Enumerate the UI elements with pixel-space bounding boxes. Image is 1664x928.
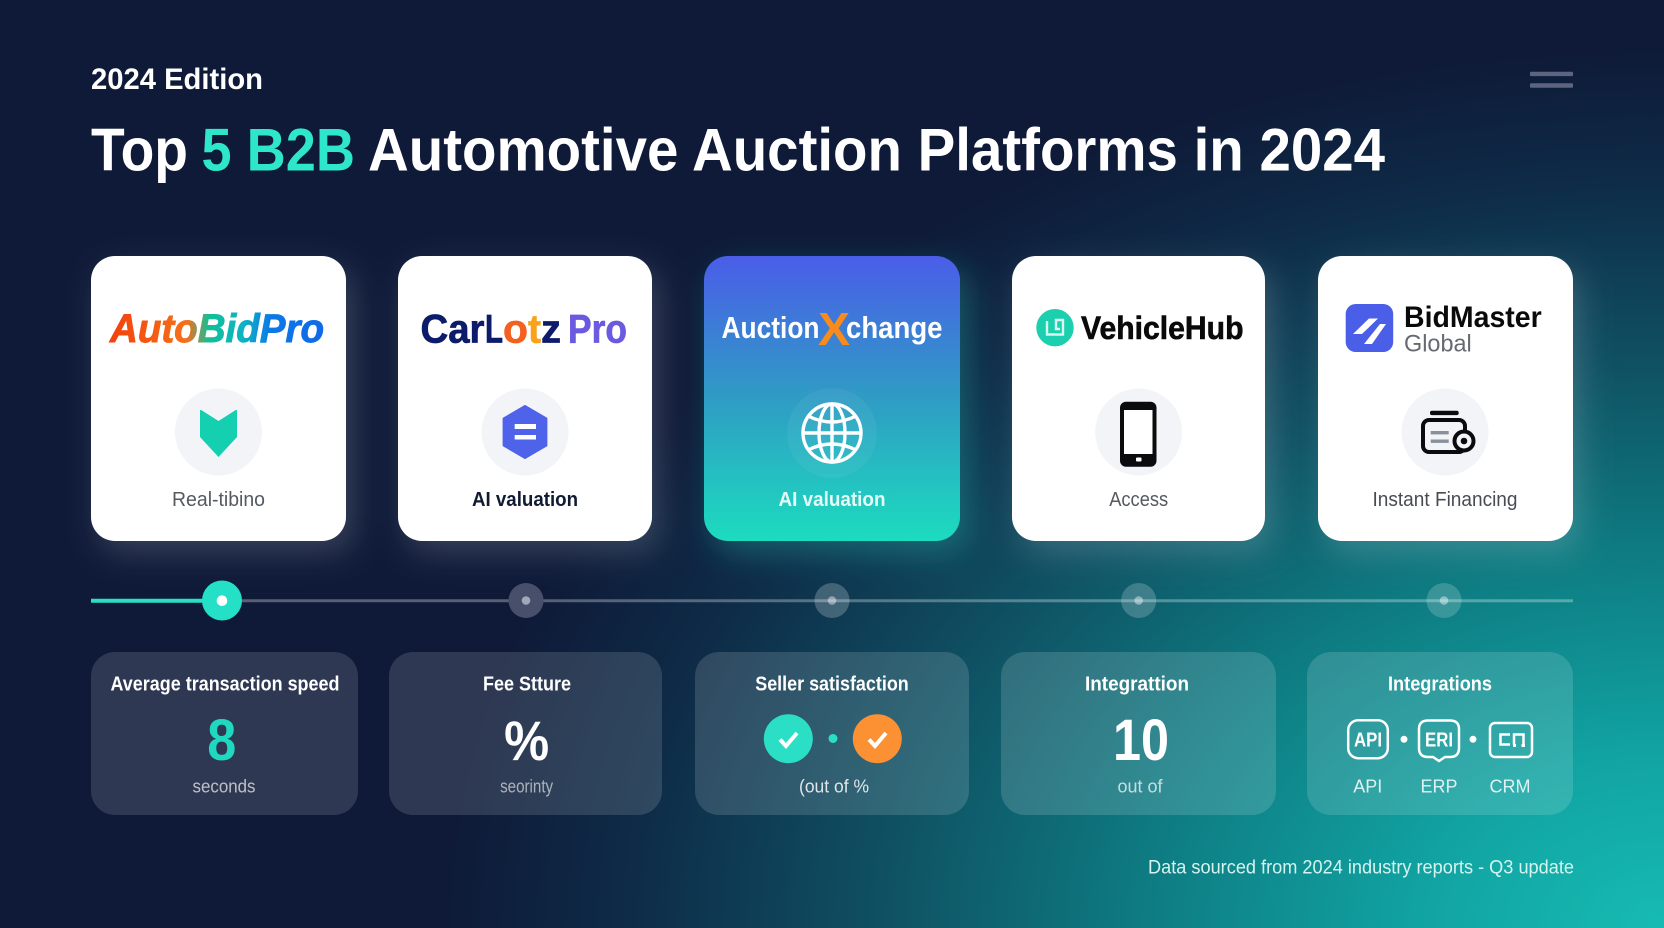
icon: dot [1470, 736, 1476, 743]
panel: integrations [1307, 652, 1573, 815]
node: active [202, 580, 242, 620]
panel: BidMaster Global card [1318, 256, 1573, 541]
logo: CarLotz Pro: Pro [568, 308, 627, 352]
timeline [91, 580, 1573, 620]
logo: CarLotz Pro: L [485, 308, 503, 352]
node: 4 [1121, 583, 1156, 618]
logo: CarLotz Pro: o [503, 308, 528, 352]
logo: CarLotz Pro: t [528, 308, 541, 352]
logo: AutoBidPro: AutoBidPro [109, 307, 324, 351]
logo: VehicleHub: VehicleHub [1081, 310, 1244, 346]
title: Top [91, 116, 188, 184]
label: feature: AI valuation [778, 489, 886, 511]
logo: AuctionXchange: Auction [722, 310, 820, 345]
panel: fee structure [389, 652, 662, 815]
stat title: Seller satisfaction [755, 674, 909, 696]
icon: teal check [764, 714, 813, 763]
logo: CarLotz Pro: z [541, 308, 561, 352]
card glows [99, 268, 1581, 553]
label: API: API [1353, 777, 1382, 797]
panel: AutoBidPro card [91, 256, 346, 541]
label: ERP: ERP [1420, 777, 1458, 797]
label: CRM: CRM [1490, 777, 1530, 797]
icon: API: API [1354, 730, 1382, 752]
logo: BidMaster Global [1346, 301, 1542, 358]
icon: hexagon [482, 388, 568, 476]
panel: average transaction speed [91, 652, 358, 815]
label: feature: Instant Financing [1372, 489, 1518, 511]
stat unit: (out of % [799, 777, 869, 797]
icon: phone [1095, 388, 1182, 476]
stat title: Fee Stture [483, 674, 571, 696]
logo: AuctionXchange: X [818, 303, 850, 355]
icon: globe [787, 388, 877, 478]
icon: menu [1530, 72, 1573, 88]
stat value: 10 [1113, 708, 1169, 773]
title: Automotive Auction Platforms in 2024 [368, 116, 1386, 184]
node: 2 [508, 583, 544, 618]
stat title: Integrattion [1085, 674, 1189, 696]
stat unit: out of [1118, 777, 1163, 797]
label: feature: AI valuation [472, 489, 578, 511]
stat unit: seconds [192, 777, 256, 797]
logo: BidMaster Global: BidMaster [1404, 301, 1542, 334]
logo: AuctionXchange: change [846, 310, 942, 345]
logo: CarLotz Pro: Car [420, 308, 484, 352]
node: 5 [1426, 583, 1462, 618]
panel: CarLotz Pro card [398, 256, 652, 541]
node: 3 [814, 583, 850, 618]
stat value: % [504, 709, 549, 772]
icon: dot [1400, 736, 1408, 743]
icon: shield [175, 388, 262, 476]
label: feature: Access [1109, 489, 1168, 511]
panel: AuctionXchange card [704, 256, 960, 541]
panel: VehicleHub card [1012, 256, 1265, 541]
icon: ERP [1419, 720, 1459, 761]
panel: seller satisfaction [695, 652, 969, 815]
icon: orange check [853, 714, 902, 763]
title: 5 B2B [202, 116, 355, 184]
stat title: Integrations [1388, 674, 1492, 696]
icon: wallet [1402, 388, 1488, 476]
edition label: 2024 Edition [91, 63, 263, 96]
footer: source note: Data sourced from 2024 industry reports - Q3 update [1148, 858, 1574, 878]
stat title: Average transaction speed [110, 674, 340, 696]
icon: dot [828, 734, 838, 743]
stat value: 8 [207, 708, 236, 773]
stat unit: seorinty [500, 777, 553, 797]
label: feature: Real-tibino [172, 489, 265, 511]
icon: CRM [1490, 723, 1532, 757]
panel: integration score [1001, 652, 1276, 815]
icon: API [1348, 720, 1388, 758]
icon: ERP: ERI [1425, 730, 1453, 752]
logo: BidMaster Global: Global [1404, 330, 1472, 358]
